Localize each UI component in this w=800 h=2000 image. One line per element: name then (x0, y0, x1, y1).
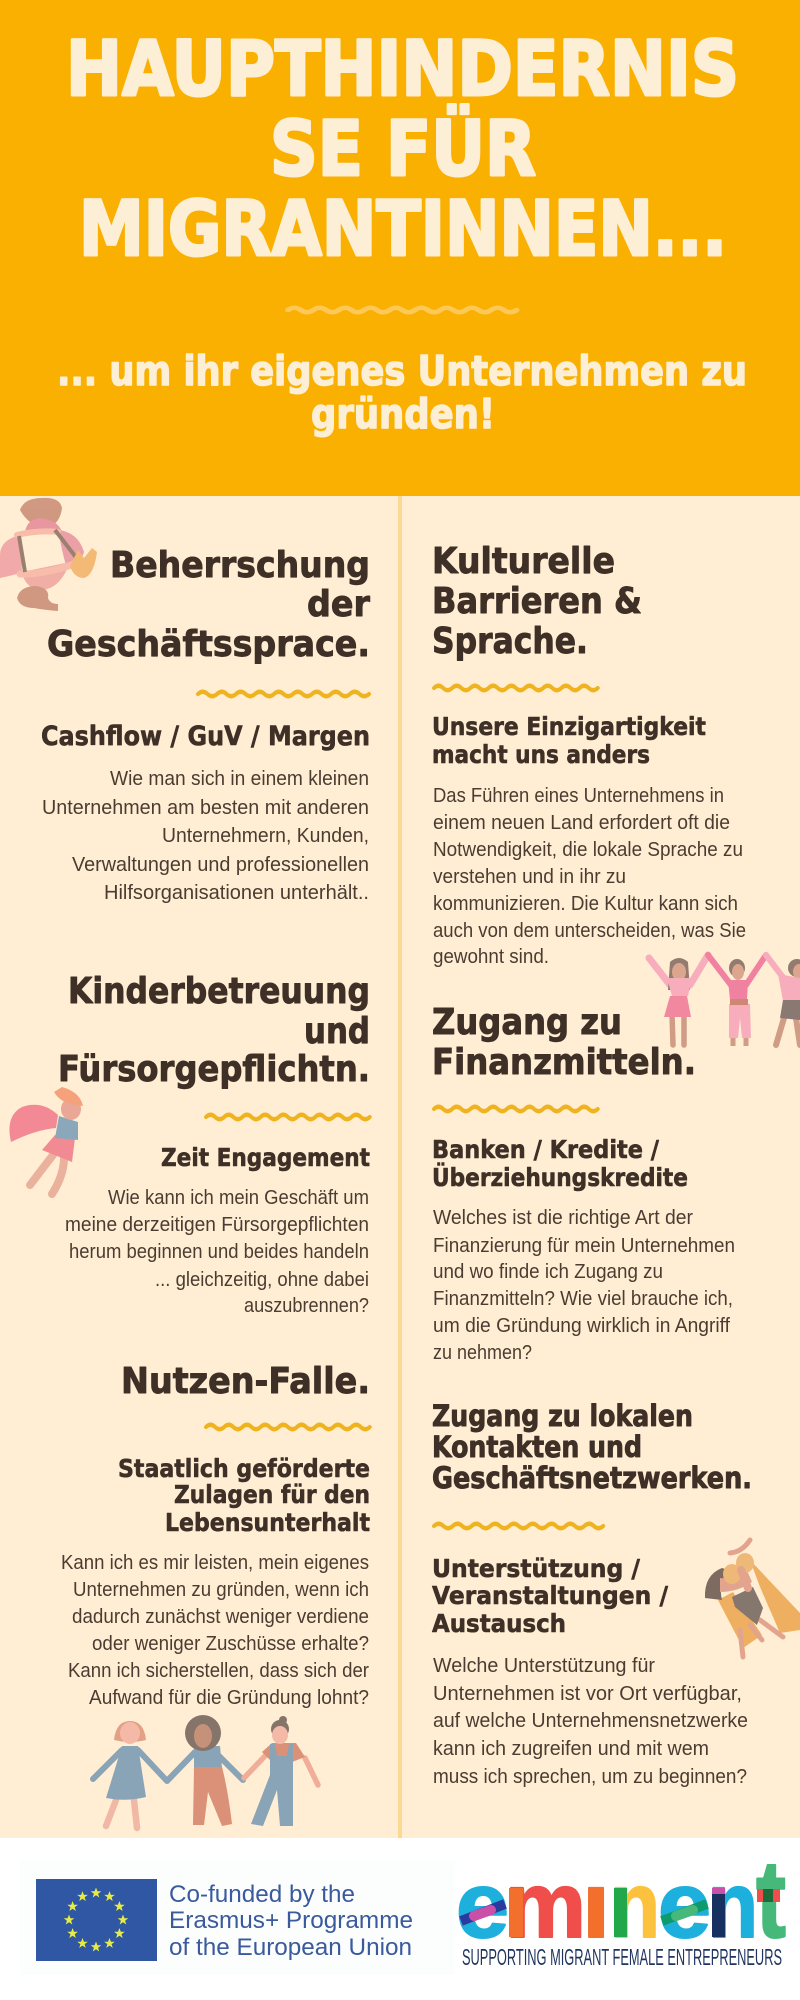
subheading: Cashflow / GuV / Margen (41, 721, 370, 752)
body text: auszubrennen? (244, 1294, 369, 1317)
body text: Finanzierung für mein Unternehmen (433, 1234, 735, 1257)
heading (58, 971, 370, 1090)
heading: Kontakten und (432, 1430, 642, 1464)
heading (432, 1002, 696, 1083)
panel: Zugang zu Finanzmitteln (432, 1002, 735, 1364)
body text: Unternehmern, Kunden, (162, 824, 369, 847)
body text: meine derzeitigen Fürsorgepflichten (65, 1213, 369, 1236)
panel: right column (432, 541, 800, 1788)
title: SE FÜR (270, 103, 536, 193)
body text (42, 767, 369, 904)
body text: verstehen und in ihr zu (433, 865, 626, 888)
body text: Verwaltungen und professionellen (72, 853, 369, 876)
heading: Zugang zu lokalen (432, 1399, 693, 1433)
wave (434, 1107, 598, 1111)
body text: um die Gründung wirklich in Angriff (433, 1314, 730, 1337)
heading: Geschäftsnetzwerken. (432, 1461, 752, 1495)
heading: Kinderbetreuung (68, 971, 370, 1012)
panel: Geschäftssprache (0, 498, 370, 904)
heading: Nutzen-Falle. (121, 1361, 370, 1402)
logo: eminent: m (505, 1853, 586, 1957)
wave (206, 1115, 370, 1119)
body text: dadurch zunächst weniger verdiene (72, 1605, 369, 1628)
panel: Kinderbetreuung (9, 971, 370, 1317)
body text: herum beginnen und beides handeln (69, 1240, 369, 1263)
subheading: Unterstützung / (432, 1554, 641, 1583)
title wave divider (288, 308, 517, 312)
heading (47, 545, 370, 665)
body text (65, 1186, 369, 1317)
logo: eminent (456, 1838, 786, 1970)
body text (433, 784, 746, 968)
subheading (432, 1554, 669, 1638)
panel: Nutzen-Falle (61, 1361, 370, 1828)
body text: Notwendigkeit, die lokale Sprache zu (433, 838, 743, 861)
logo: eminent: t (756, 1838, 786, 1961)
logo: eminent: ı (582, 1853, 610, 1957)
body text: Unternehmen am besten mit anderen (42, 796, 369, 819)
body text: gewohnt sind. (433, 945, 549, 968)
subheading (432, 1135, 688, 1192)
body text: Welche Unterstützung für (433, 1654, 655, 1677)
logo: eminent: n (610, 1853, 660, 1957)
subheading: Zeit Engagement (161, 1143, 370, 1172)
body text: oder weniger Zuschüsse erhalte? (92, 1632, 369, 1655)
subheading: Überziehungskredite (432, 1162, 688, 1192)
body text: Wie kann ich mein Geschäft um (108, 1186, 369, 1209)
subheading: Austausch (432, 1609, 566, 1638)
logo: eminent: n (708, 1853, 758, 1957)
heading (432, 541, 642, 662)
column divider (398, 496, 402, 1838)
body text: auf welche Unternehmensnetzwerke (433, 1709, 748, 1732)
heading: Kulturelle (432, 541, 615, 582)
heading: Fürsorgepflichtn. (58, 1049, 370, 1090)
subheading: Unsere Einzigartigkeit (432, 712, 706, 741)
heading: Geschäftssprace. (47, 624, 370, 665)
subheading: macht uns anders (432, 740, 650, 769)
body text: Kann ich es mir leisten, mein eigenes (61, 1551, 369, 1574)
body text: einem neuen Land erfordert oft die (433, 811, 730, 834)
icon: three women holding hands (93, 1715, 318, 1828)
logo: EU flag (36, 1879, 157, 1961)
body text: Kann ich sicherstellen, dass sich der (68, 1659, 369, 1682)
heading: Finanzmitteln. (432, 1042, 696, 1083)
subheading: Staatlich geförderte (118, 1454, 370, 1483)
body text: Hilfsorganisationen unterhält.. (104, 881, 369, 904)
logo: eminent: e (456, 1853, 509, 1957)
wave (434, 686, 598, 690)
heading: Sprache. (432, 621, 588, 662)
wave (198, 692, 369, 696)
heading (432, 1399, 752, 1495)
body text: kommunizieren. Die Kultur kann sich (433, 892, 738, 915)
panel: Kulturelle Barrieren (432, 541, 800, 1046)
icon: women with raised arms (649, 955, 800, 1046)
heading: und (304, 1011, 370, 1052)
subheading: Zulagen für den (174, 1480, 370, 1509)
body text: Welches ist die richtige Art der (433, 1206, 693, 1229)
body text: auch von dem unterscheiden, was Sie (433, 919, 746, 942)
funding text (169, 1881, 413, 1961)
body text (433, 1654, 748, 1788)
body text: kann ich zugreifen und mit wem (433, 1737, 709, 1760)
funding text: Erasmus+ Programme (169, 1907, 413, 1934)
body text: ... gleichzeitig, ohne dabei (155, 1268, 369, 1291)
body text (433, 1206, 735, 1364)
body text: Unternehmen ist vor Ort verfügbar, (433, 1682, 742, 1705)
subheading (118, 1454, 370, 1537)
funding text: of the European Union (169, 1934, 412, 1961)
title (66, 24, 739, 273)
icon: flying women with capes (705, 1540, 800, 1657)
body text: und wo finde ich Zugang zu (433, 1260, 663, 1283)
body text: Unternehmen zu gründen, wenn ich (73, 1578, 369, 1601)
subheading: Banken / Kredite / (432, 1135, 660, 1164)
subtitle (57, 347, 747, 438)
icon: circle of women (0, 498, 97, 611)
body text: Das Führen eines Unternehmens in (433, 784, 724, 807)
panel: Zugang zu Netzwerken (432, 1399, 800, 1788)
footer band (0, 1838, 800, 2000)
subtitle: gründen! (311, 390, 495, 438)
subheading (432, 712, 706, 769)
heading: Beherrschung (110, 545, 370, 586)
subheading: Veranstaltungen / (432, 1581, 669, 1610)
subheading: Lebensunterhalt (165, 1508, 370, 1537)
heading: der (307, 584, 370, 625)
icon: superhero woman (9, 1087, 83, 1194)
logo: eminent: e (658, 1853, 711, 1957)
header banner (0, 0, 800, 496)
body text: zu nehmen? (433, 1341, 532, 1364)
heading: Zugang zu (432, 1002, 622, 1043)
heading: Barrieren & (432, 581, 642, 622)
body text: muss ich sprechen, um zu beginnen? (433, 1765, 747, 1788)
body text: Wie man sich in einem kleinen (110, 767, 369, 790)
panel: left column (0, 498, 370, 1828)
body text: Aufwand für die Gründung lohnt? (89, 1686, 369, 1709)
wave (206, 1425, 370, 1429)
body text: Finanzmitteln? Wie viel brauche ich, (433, 1287, 733, 1310)
wave (434, 1524, 603, 1528)
funding text: Co-funded by the (169, 1881, 355, 1908)
body text (61, 1551, 369, 1709)
